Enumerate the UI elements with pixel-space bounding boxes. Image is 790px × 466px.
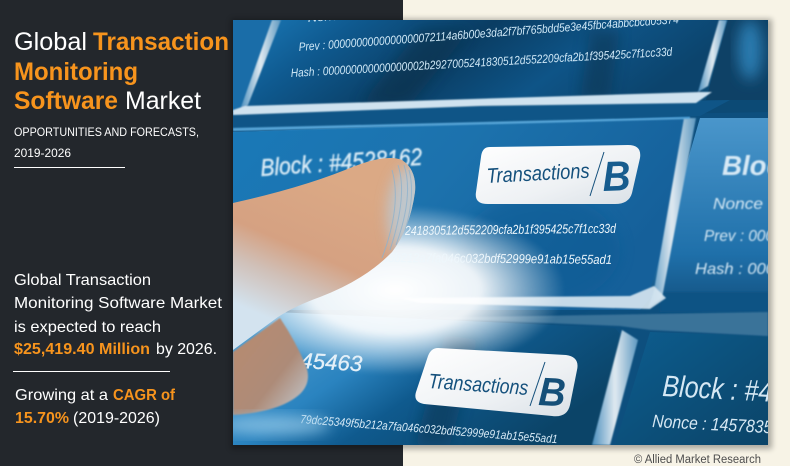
title: Global (14, 28, 87, 56)
text rows on lower right block (652, 375, 768, 434)
text block: market value (14, 272, 223, 358)
panel: lower right block (640, 332, 768, 445)
subtitle: OPPORTUNITIES AND FORECASTS, (14, 127, 199, 139)
icon: index finger (233, 158, 416, 350)
metal frame struts (233, 20, 727, 445)
subtitle (14, 127, 199, 160)
badge: Transactions bottom: Transactions (428, 370, 529, 400)
text block: market value: $25,419.40 Million (14, 341, 150, 358)
white glow (256, 207, 562, 374)
badge: Transactions top: Transactions (486, 160, 591, 188)
panel: top blockchain block (233, 20, 768, 122)
copyright: © Allied Market Research (634, 454, 761, 466)
text rows on top block: Hash : 000000000000000002b2927005241830512d552209cfa2b1f395425c7f1cc33d (290, 45, 673, 80)
text rows on top block (291, 20, 678, 77)
text: lower block number: 45463 (300, 348, 364, 376)
text rows on right block: Hash : 000 (695, 261, 775, 278)
title: Market (125, 87, 201, 115)
text rows on right block: Nonce (713, 196, 763, 213)
text row on lower block: 79dc25349f5b212a7fa046c032bdf52999e91ab15e55ad1 (300, 412, 558, 446)
photo: finger touching blockchain panels (220, 8, 782, 446)
badge: Transactions bottom (415, 348, 578, 416)
text block: market value: Global Transaction (14, 272, 151, 289)
subtitle: 2019-2026 (14, 148, 71, 160)
panel: right block (652, 118, 768, 292)
text rows on right block (694, 154, 768, 275)
text rows on right block: Bloc (722, 150, 782, 181)
text rows on right block: Prev : 000 (704, 228, 774, 245)
title: Monitoring (14, 58, 138, 86)
text block: CAGR: Growing at a (15, 387, 108, 404)
text: block number: Block : #4528162 (260, 144, 423, 182)
panel: lower block (233, 310, 625, 445)
text rows on middle block (405, 223, 616, 264)
text block: market value: Monitoring Software Market (14, 295, 223, 312)
badge: Transactions top (476, 145, 640, 204)
text block: market value: by 2026. (156, 341, 217, 358)
badge: Transactions bottom: B (538, 370, 567, 415)
text block: CAGR (15, 387, 176, 427)
text block: market value: is expected to reach (14, 319, 161, 336)
panel: dark left side (0, 0, 403, 466)
text rows on middle block: 241830512d552209cfa2b1f395425c7f1cc33d (404, 221, 617, 238)
panel: middle block (233, 115, 690, 310)
text block: CAGR: 15.70% (15, 410, 69, 427)
bottom text glow on lower panel (220, 415, 330, 435)
title: Transaction (93, 28, 229, 56)
title: Software (14, 87, 118, 115)
title (14, 28, 229, 115)
text rows on top block: Prev : 0000000000000000072114a6b00e3da2f7bf765bdd5e3e45fbc4abbcbcd05374 (298, 12, 679, 54)
text rows on lower right block: Nonce : 1457835 (652, 411, 774, 437)
text block: CAGR: (2019-2026) (73, 410, 160, 427)
photo shadow (231, 19, 772, 449)
icon: thumb (233, 318, 308, 415)
text rows on top block: Nonce : (307, 8, 353, 25)
badge: Transactions top: B (602, 152, 631, 200)
text rows on middle block: f5b212a7fa046c032bdf52999e91ab15e55ad1 (385, 250, 612, 267)
text block: CAGR: CAGR of (113, 387, 176, 404)
